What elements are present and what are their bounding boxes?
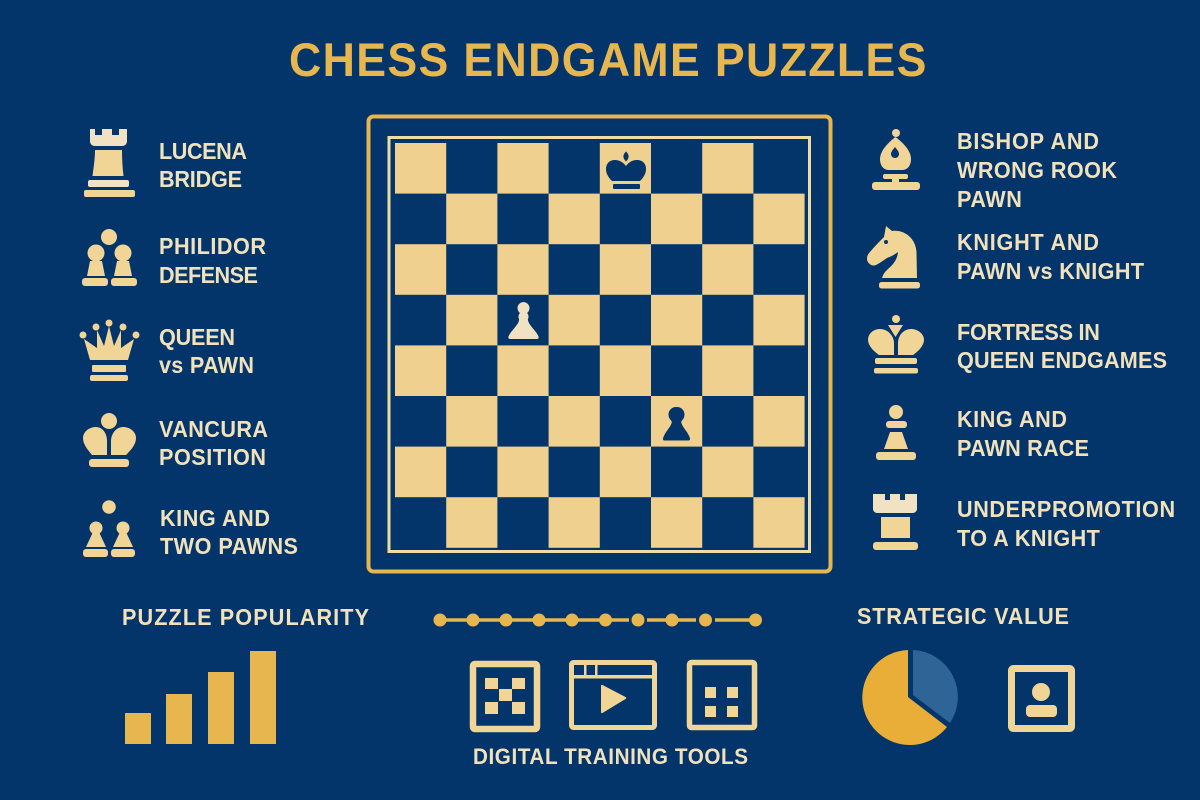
label: PHILIDOR — [159, 233, 266, 259]
checker squares — [395, 143, 805, 548]
label: LUCENA — [159, 138, 247, 164]
icon: grid tool — [690, 662, 754, 728]
bar chart — [125, 651, 276, 744]
icon: board tool — [473, 664, 537, 729]
panel: puzzle popularity — [122, 604, 369, 744]
icon: video player — [571, 662, 655, 728]
label: QUEEN ENDGAMES — [957, 347, 1167, 373]
title: CHESS ENDGAME PUZZLES — [289, 34, 926, 86]
label: KING AND — [160, 505, 270, 531]
item: Knight and Pawn vs Knight — [867, 226, 1144, 288]
label: FORTRESS IN — [957, 319, 1100, 345]
timeline — [434, 614, 762, 626]
piece: white pawn — [508, 302, 539, 339]
item: Lucena Bridge — [84, 129, 247, 197]
caption: DIGITAL TRAINING TOOLS — [473, 744, 748, 769]
heading: PUZZLE POPULARITY — [122, 604, 369, 630]
label: QUEEN — [159, 324, 235, 350]
item: Underpromotion to a Knight — [873, 494, 1175, 551]
label: UNDERPROMOTION — [957, 496, 1175, 522]
label: TWO PAWNS — [160, 533, 298, 559]
label: TO A KNIGHT — [957, 525, 1100, 551]
pie chart — [862, 650, 958, 745]
inner board frame — [389, 138, 810, 552]
item: Queen vs Pawn — [80, 320, 254, 381]
piece: navy king — [606, 152, 646, 189]
item: Vancura Position — [83, 413, 268, 470]
panel: digital training tools — [434, 614, 762, 769]
icon: knight — [867, 226, 920, 288]
label: BISHOP AND — [957, 128, 1099, 154]
label: VANCURA — [159, 416, 268, 442]
panel: chess board — [368, 116, 830, 572]
icon: profile card — [1012, 668, 1072, 728]
item: Fortress in Queen Endgames — [868, 315, 1167, 374]
label: KNIGHT AND — [957, 229, 1099, 255]
item: Bishop and Wrong Rook Pawn — [872, 128, 1117, 212]
icon: crown — [868, 315, 924, 374]
icon: king — [83, 413, 136, 467]
label: PAWN RACE — [957, 435, 1089, 461]
icon: pawn — [876, 405, 916, 460]
label: KING AND — [957, 406, 1067, 432]
panel: strategic value — [857, 603, 1072, 745]
item: King and Two Pawns — [83, 500, 298, 559]
icon: rook — [873, 494, 918, 550]
icon: queen — [80, 320, 140, 381]
icon: pawns — [82, 229, 137, 286]
item: King and Pawn Race — [876, 405, 1089, 461]
label: POSITION — [159, 444, 266, 470]
icon: bishop — [872, 129, 920, 190]
label: WRONG ROOK — [957, 157, 1117, 183]
panel: right puzzle list — [867, 128, 1175, 551]
icon: king and pawns — [83, 500, 135, 557]
outer board frame — [368, 116, 830, 572]
label: PAWN — [957, 186, 1022, 212]
label: vs PAWN — [159, 352, 254, 378]
panel: left puzzle list — [80, 129, 298, 559]
piece: navy pawn — [663, 407, 690, 440]
icon: rook — [84, 129, 135, 197]
label: PAWN vs KNIGHT — [957, 258, 1144, 284]
label: BRIDGE — [159, 166, 242, 192]
label: DEFENSE — [159, 262, 258, 288]
heading: STRATEGIC VALUE — [857, 603, 1069, 629]
item: Philidor Defense — [82, 229, 266, 288]
